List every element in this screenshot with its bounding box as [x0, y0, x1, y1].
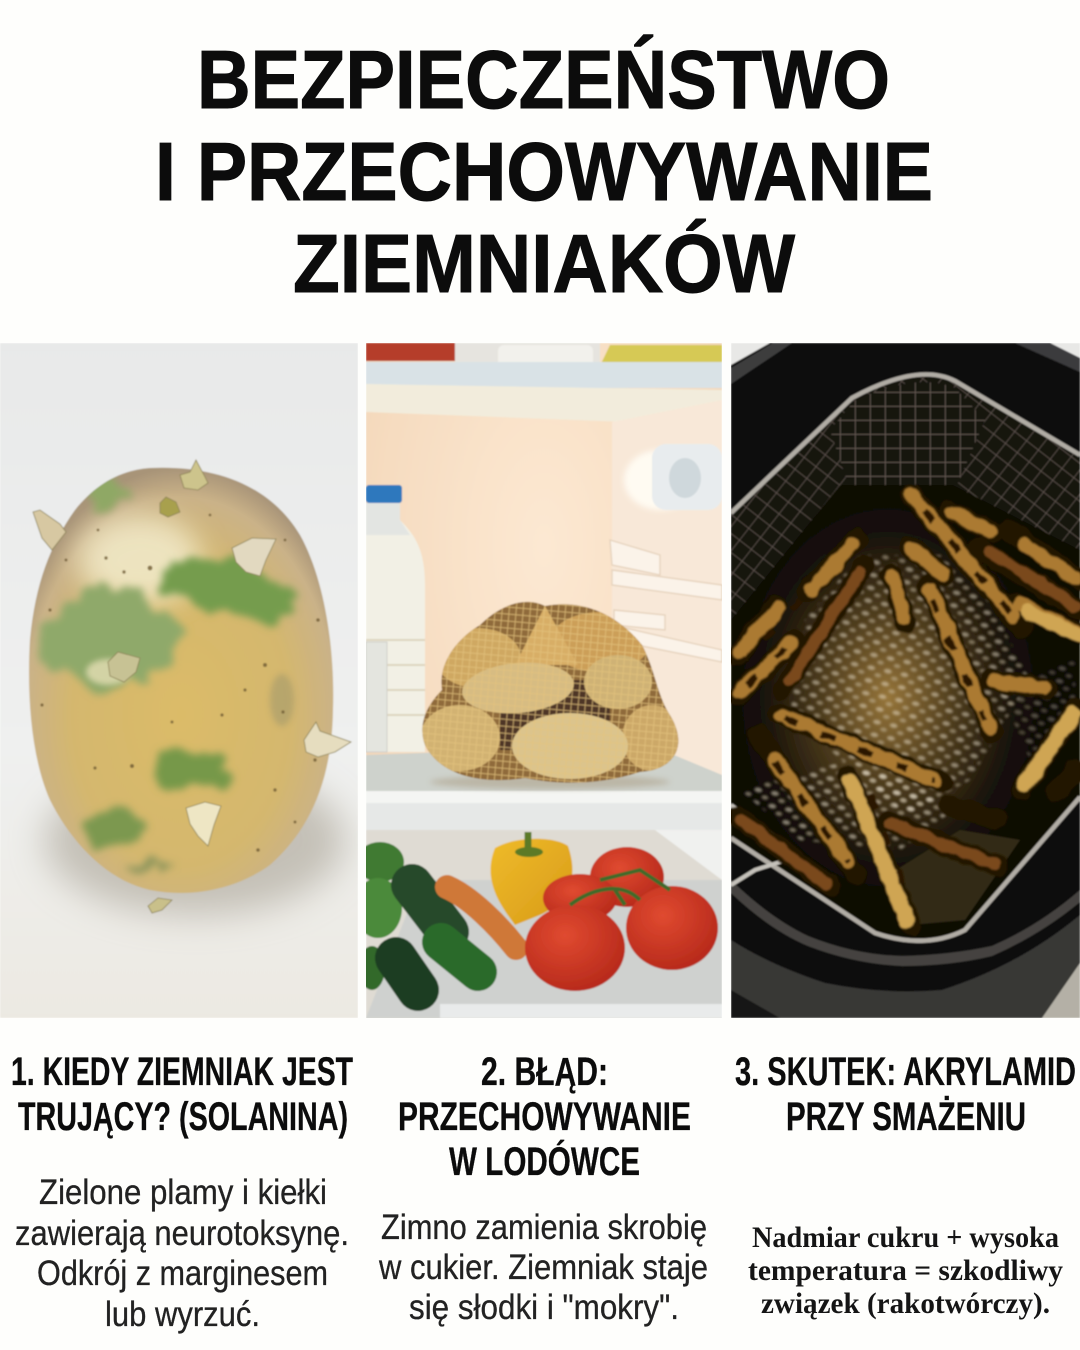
door ledges: [610, 540, 722, 662]
heading: solanine: [11, 1050, 353, 1139]
heading: acrylamide: [735, 1050, 1076, 1139]
text block: solanine advice: Odkrój z marginesem: [37, 1254, 328, 1293]
basket rim: [731, 374, 1080, 941]
text block: acrylamide explanation: związek (rakotwórczy).: [761, 1287, 1050, 1320]
glass shelf: [366, 745, 722, 830]
text block: solanine advice: lub wyrzuć.: [105, 1295, 260, 1334]
fryer lower body: [731, 880, 1080, 1018]
sprouts: [33, 460, 351, 913]
title: I PRZECHOWYWANIE: [155, 125, 933, 218]
basket handle: [731, 805, 780, 885]
text block: acrylamide explanation: Nadmiar cukru + wysoka: [752, 1221, 1059, 1254]
heading: fridge mistake: 2. BŁĄD:: [481, 1050, 608, 1094]
heading: solanine: 1. KIEDY ZIEMNIAK JEST: [11, 1050, 353, 1094]
cucumbers: [412, 885, 448, 932]
frying oil: [731, 485, 1080, 938]
title: [155, 33, 933, 310]
panel: burnt fries in a fryer basket: [731, 343, 1080, 1018]
heading: fridge mistake: PRZECHOWYWANIE: [398, 1095, 691, 1139]
mesh basket: [731, 377, 1080, 941]
text block: solanine advice: [15, 1173, 349, 1334]
title: ZIEMNIAKÓW: [293, 217, 796, 310]
fridge lamp: [624, 444, 722, 510]
text block: fridge explanation: [378, 1208, 708, 1327]
text block: solanine advice: zawierają neurotoksynę.: [15, 1214, 349, 1253]
heading: fridge mistake: W LODÓWCE: [449, 1138, 640, 1184]
text block: solanine advice: Zielone plamy i kiełki: [39, 1173, 327, 1212]
panel: sprouting green potato photo: [0, 343, 358, 1018]
fryer corners: [731, 343, 1080, 384]
text block: acrylamide explanation: [748, 1221, 1063, 1320]
panel: fridge photo with potatoes in a net: [354, 343, 722, 1020]
text block: acrylamide explanation: temperatura = szkodliwy: [748, 1254, 1063, 1287]
milk bottle: [366, 485, 425, 752]
fries: [737, 495, 1080, 926]
char marks on fries: [745, 510, 1020, 900]
heading: solanine: TRUJĄCY? (SOLANINA): [18, 1095, 348, 1139]
potato body: [29, 468, 333, 893]
right side wall: [612, 400, 722, 790]
vegetables: [354, 832, 718, 991]
text block: fridge explanation: Zimno zamienia skrobię: [381, 1208, 707, 1247]
vegetable drawer: [366, 830, 722, 1020]
title: BEZPIECZEŃSTWO: [197, 33, 890, 126]
carrot: [447, 887, 516, 948]
yellow pepper: [491, 839, 572, 925]
top shelf food: [366, 343, 722, 363]
text block: fridge explanation: w cukier. Ziemniak staje: [378, 1248, 708, 1287]
lettuce: [366, 841, 405, 991]
heading: fridge mistake: [398, 1050, 691, 1184]
potato net bag: [421, 601, 680, 792]
upper shelf: [366, 362, 722, 422]
tomatoes: [590, 847, 664, 907]
text block: fridge explanation: się słodki i "mokry".: [409, 1288, 679, 1327]
